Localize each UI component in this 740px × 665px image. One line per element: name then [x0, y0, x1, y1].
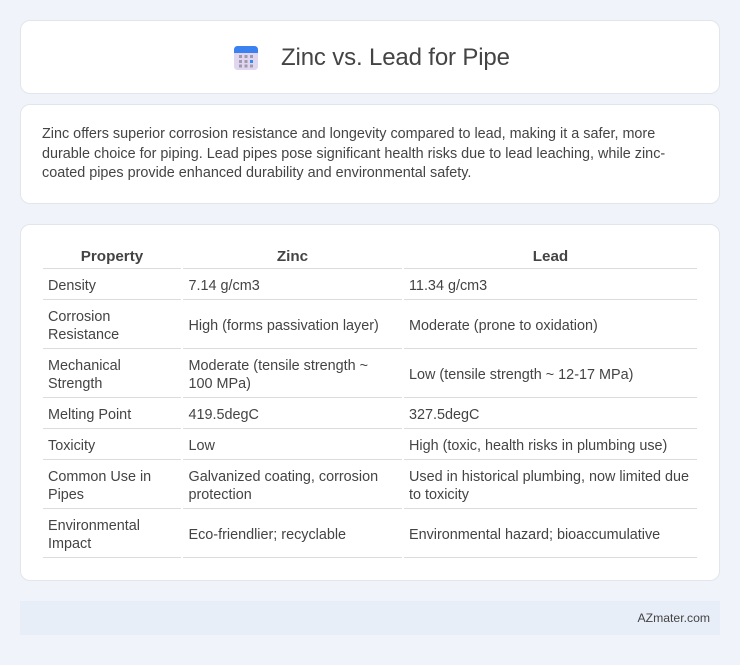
comparison table: Property: [81, 248, 143, 265]
footer bar: [20, 601, 720, 635]
comparison table: Environmental: [48, 518, 140, 534]
comparison table: Pipes: [48, 487, 84, 503]
comparison table: Strength: [48, 376, 102, 392]
comparison table: High (toxic, health risks in plumbing use): [409, 438, 667, 454]
comparison table: High (forms passivation layer): [188, 318, 379, 334]
comparison table: Galvanized coating, corrosion: [188, 469, 378, 485]
comparison table: Low: [188, 438, 215, 454]
row: common use in pipes: [48, 469, 689, 503]
row: toxicity: [48, 438, 667, 454]
comparison table: protection: [188, 487, 252, 503]
column headers: [81, 248, 568, 265]
comparison table: Toxicity: [48, 438, 95, 454]
comparison table: 100 MPa): [188, 376, 251, 392]
comparison table: 7.14 g/cm3: [188, 278, 260, 294]
footer source: AZmater.com: [638, 611, 710, 625]
comparison table: Moderate (prone to oxidation): [409, 318, 598, 334]
comparison table: Resistance: [48, 327, 119, 343]
row: corrosion resistance: [48, 309, 598, 343]
comparison table: Mechanical: [48, 358, 121, 374]
comparison table: Common Use in: [48, 469, 151, 485]
table panel: [20, 224, 720, 581]
header panel: [20, 20, 720, 94]
row: melting point: [48, 407, 479, 423]
summary text: [42, 126, 665, 181]
comparison table: to toxicity: [409, 487, 469, 503]
comparison table: 11.34 g/cm3: [409, 278, 487, 294]
row: density: [48, 278, 487, 294]
comparison table: Moderate (tensile strength ~: [188, 358, 368, 374]
summary panel: [20, 104, 720, 204]
icon: calendar: [234, 46, 258, 70]
comparison table: Eco-friendlier; recyclable: [188, 527, 346, 543]
comparison table: Density: [48, 278, 96, 294]
comparison table: Corrosion: [48, 309, 110, 325]
summary text: durable choice for piping. Lead pipes pose significant health risks due to lead leaching, while zinc-: [42, 146, 665, 162]
comparison table: Low (tensile strength ~ 12-17 MPa): [409, 367, 633, 383]
summary text: Zinc offers superior corrosion resistance and longevity compared to lead, making it a safer, more: [42, 126, 655, 142]
title: Zinc vs. Lead for Pipe: [281, 44, 510, 71]
summary text: coated pipes provide enhanced durability and environmental safety.: [42, 165, 471, 181]
comparison table: Used in historical plumbing, now limited due: [409, 469, 689, 485]
row: mechanical strength: [48, 358, 633, 392]
comparison table: Lead: [533, 248, 568, 265]
row: environmental impact: [48, 518, 660, 552]
comparison table: Zinc: [277, 248, 308, 265]
comparison table: Environmental hazard; bioaccumulative: [409, 527, 660, 543]
comparison table: 419.5degC: [188, 407, 259, 423]
comparison table: Melting Point: [48, 407, 131, 423]
comparison table: Impact: [48, 536, 91, 552]
comparison table: 327.5degC: [409, 407, 479, 423]
